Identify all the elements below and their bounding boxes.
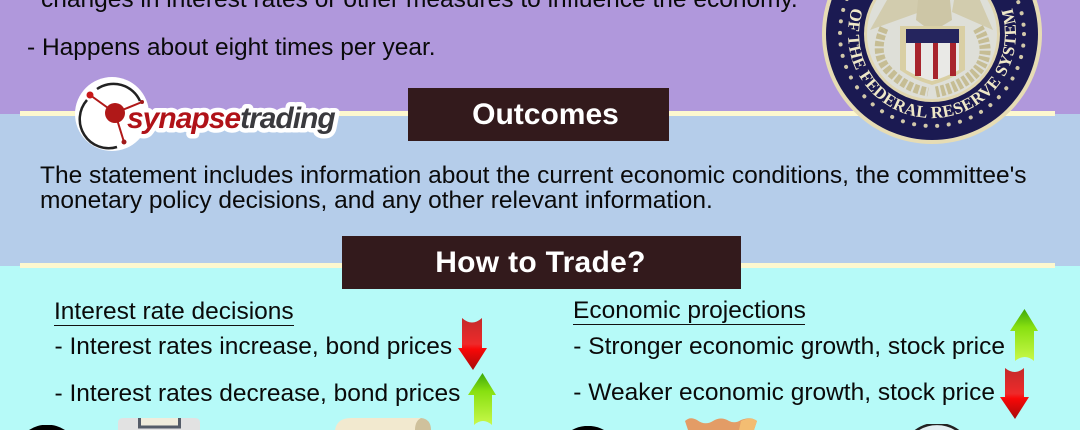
text: outcomes description: The statement includes information about the current economic conditions, the committee's — [40, 162, 1027, 189]
text: outcomes description — [40, 162, 1027, 214]
text: frequency: - Happens about eight times per year. — [27, 34, 436, 61]
logo: synapsetrading: synapsetrading — [127, 102, 335, 135]
icon: magnifier — [914, 424, 960, 430]
icon: hands — [685, 418, 757, 430]
text: outcomes description: monetary policy decisions, and any other relevant information. — [40, 186, 713, 214]
heading: interest rate decisions: Interest rate decisions — [54, 298, 294, 325]
icon: clipboard — [118, 418, 200, 430]
text: rates decrease: - Interest rates decrease, bond prices — [54, 380, 460, 407]
heading: how to trade — [342, 236, 741, 289]
icon: green up arrow — [1010, 309, 1038, 361]
logo: synapsetrading: synapsetrading — [127, 102, 335, 135]
icon: black circle right — [572, 426, 604, 430]
logo: synapsetrading — [75, 77, 340, 151]
icon: red down arrow — [458, 318, 487, 370]
heading: outcomes: Outcomes — [472, 98, 619, 131]
panel: purple background — [0, 0, 1080, 114]
text: weaker growth: - Weaker economic growth, stock price — [573, 379, 995, 406]
panel: blue background — [0, 114, 1080, 266]
icon: scroll — [335, 418, 431, 430]
text: stronger growth: - Stronger economic growth, stock price — [573, 333, 1005, 360]
icon: black circle left — [29, 425, 65, 430]
icon: green up arrow — [468, 373, 496, 425]
heading: how to trade: How to Trade? — [435, 246, 646, 279]
heading: economic projections: Economic projections — [573, 297, 806, 324]
heading: outcomes — [408, 88, 669, 141]
panel: cyan background — [0, 266, 1080, 430]
icon: federal reserve seal: OF THE FEDERAL RESERVE SYSTEM — [848, 8, 1016, 118]
icon: federal reserve seal — [822, 0, 1042, 144]
icon: red down arrow — [1000, 368, 1029, 419]
text: rates increase: - Interest rates increase, bond prices — [54, 333, 452, 360]
